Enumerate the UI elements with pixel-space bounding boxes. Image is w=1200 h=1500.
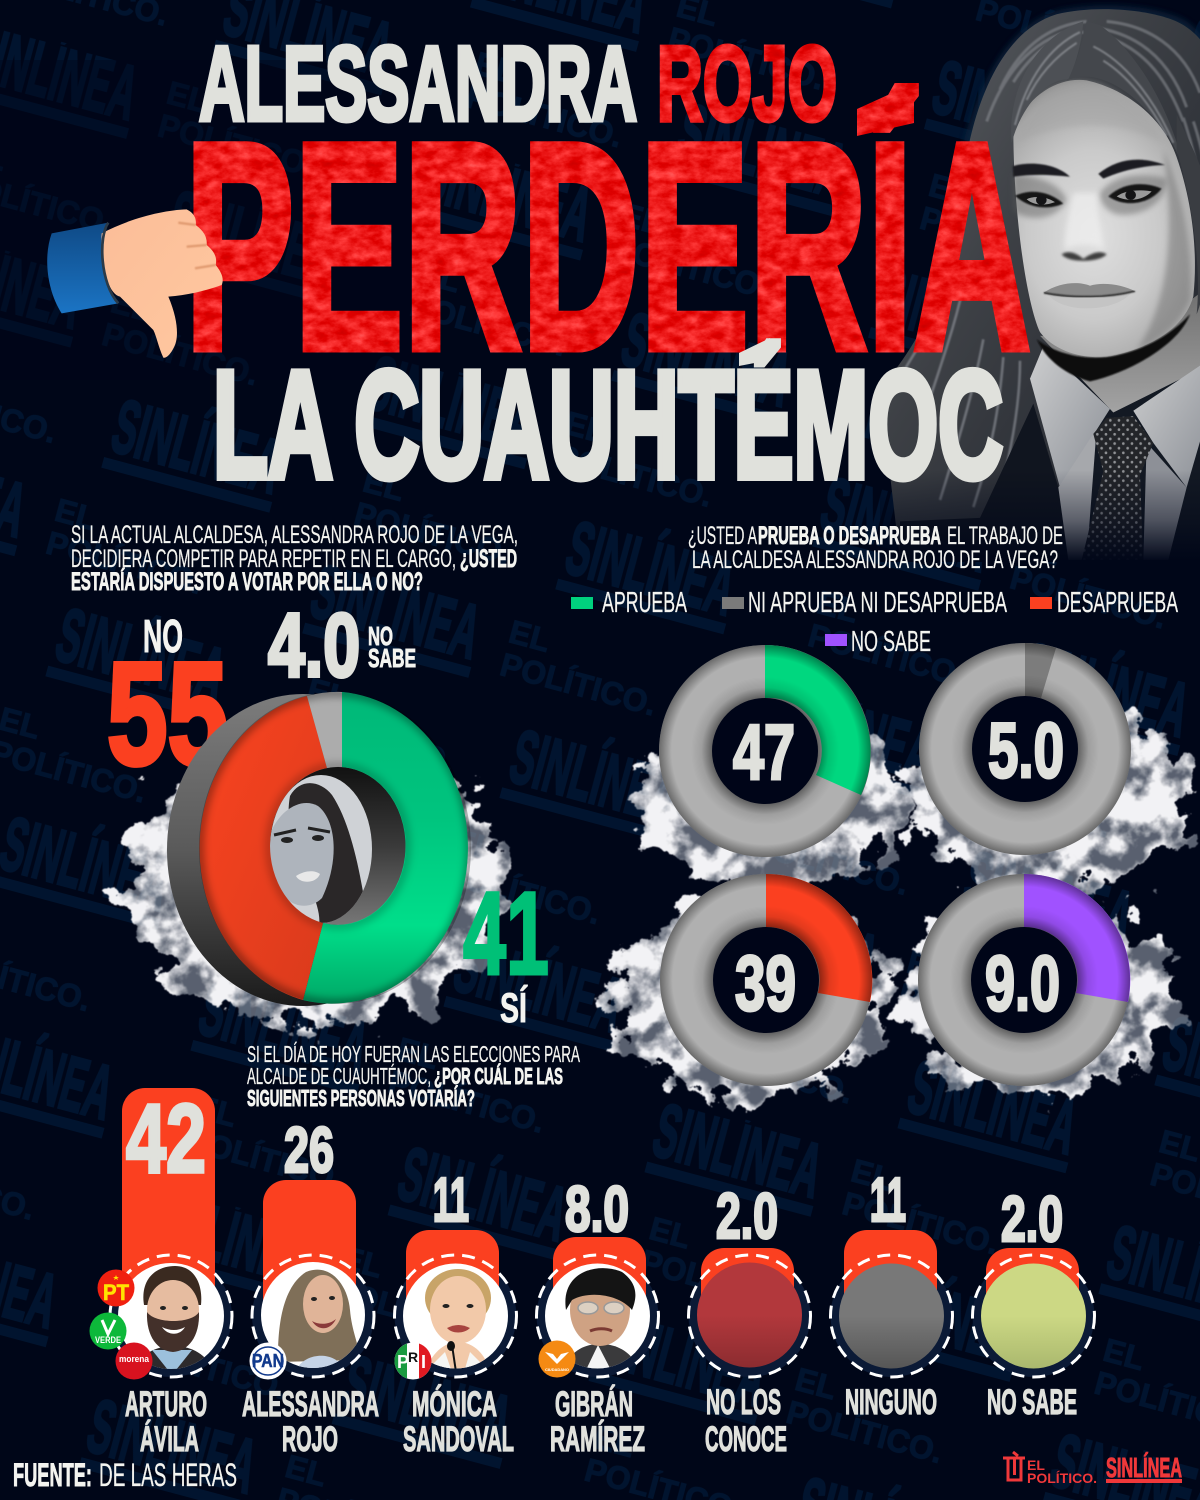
name: NO SABE <box>987 1383 1077 1422</box>
question: por quién votaría: ALCALDE DE CUAUHTÉMOC, <box>247 1063 431 1089</box>
logo: El Político <box>1003 1452 1097 1486</box>
name: SANDOVAL <box>403 1420 514 1459</box>
question: aprueba o desaprueba: ¿USTED A <box>688 522 757 550</box>
legend: NO SABE <box>851 626 931 658</box>
name <box>403 1384 514 1459</box>
logo: PT: PT <box>103 1280 130 1305</box>
stat: 4.0 no sabe: NO <box>368 621 393 651</box>
segment: no <box>200 696 327 1000</box>
3D donut chart <box>167 692 471 1006</box>
question: por quién votaría: ¿POR CUÁL DE LAS <box>434 1062 563 1089</box>
question: aprueba o desaprueba <box>688 522 1063 574</box>
logo: Verde <box>90 1312 126 1350</box>
title line 1: ROJO <box>657 25 837 143</box>
segment: sí <box>303 692 468 1004</box>
bar: No los conoce 2.0: 2.0 <box>716 1180 778 1252</box>
logo: Verde: VERDE <box>95 1335 121 1345</box>
donut: desaprueba 39: 39 <box>735 939 796 1027</box>
stat: 41 sí: SÍ <box>500 984 528 1031</box>
stat: 55 no: NO <box>143 610 183 662</box>
question: aprueba o desaprueba: PRUEBA O DESAPRUEBA <box>758 522 941 550</box>
question: aprueba o desaprueba: EL TRABAJO DE <box>947 522 1063 550</box>
clouds: right donuts <box>610 712 1195 1100</box>
question: votaría por ella: ¿USTED <box>460 545 517 573</box>
portrait fade <box>880 470 1200 562</box>
stat: 41 sí <box>463 868 549 1031</box>
question: por quién votaría <box>247 1041 580 1111</box>
bar: Ninguno 11: 11 <box>870 1166 906 1235</box>
stat: 4.0 no sabe: SABE <box>368 643 416 673</box>
name: CONOCE <box>705 1420 787 1459</box>
source: DE LAS HERAS <box>99 1457 237 1493</box>
logo: PRI: P <box>397 1352 409 1372</box>
name: GIBRÁN <box>555 1384 633 1424</box>
name <box>242 1385 379 1459</box>
bar: No sabe 2.0: 2.0 <box>1001 1183 1063 1255</box>
logo: PRI <box>394 1342 432 1380</box>
legend: APRUEBA <box>602 587 687 619</box>
bar: Arturo Ávila 42 <box>90 1084 232 1459</box>
stat: 55 no: 55 <box>107 632 228 795</box>
segment: no sabe <box>307 692 342 768</box>
bar: Gibrán Ramírez 8.0 <box>536 1173 658 1459</box>
donut: aprueba 47: 47 <box>733 708 795 796</box>
name: NINGUNO <box>845 1383 937 1422</box>
name: RAMÍREZ <box>550 1419 645 1459</box>
donut: aprueba 47 <box>659 645 871 857</box>
logo: morena <box>116 1342 152 1380</box>
question: votaría por ella: ESTARÍA DISPUESTO A VOTAR POR ELLA O NO? <box>71 567 423 596</box>
bar: No los conoce 2.0 <box>688 1180 810 1459</box>
name: ALESSANDRA <box>242 1385 379 1424</box>
source <box>13 1457 237 1493</box>
portrait: Alessandra Rojo <box>880 6 1200 562</box>
logo: Movimiento Ciudadano: CIUDADANO <box>545 1367 569 1372</box>
donut: no sabe 9.0 <box>918 874 1130 1086</box>
stat: 4.0 no sabe: 4.0 <box>268 596 360 696</box>
question: votaría por ella: SI LA ACTUAL ALCALDESA, ALESSANDRA ROJO DE LA VEGA, <box>71 521 518 549</box>
logo: El Político: POLÍTICO. <box>1027 1470 1097 1486</box>
source: FUENTE: <box>13 1457 92 1493</box>
name: NO LOS <box>706 1383 781 1422</box>
stat: 41 sí: 41 <box>463 868 549 1000</box>
donut: ni aprueba ni desaprueba 5.0 <box>919 643 1131 855</box>
name <box>125 1385 207 1459</box>
stat: 55 no <box>107 610 228 795</box>
logo: PAN: PAN <box>252 1351 284 1371</box>
name <box>550 1384 645 1459</box>
donut edge shading <box>199 692 471 1004</box>
cloud: main donut <box>128 743 508 1027</box>
bar: Alessandra Rojo 26: 26 <box>284 1114 334 1186</box>
donut: no sabe 9.0: 9.0 <box>985 939 1060 1027</box>
logo: El Político: EL <box>1027 1457 1045 1473</box>
bar: Mónica Sandoval 11 <box>394 1166 516 1459</box>
bar: Mónica Sandoval 11: 11 <box>433 1166 469 1235</box>
photo in hole <box>268 767 406 930</box>
logo: PT <box>98 1270 134 1306</box>
question: votaría por ella: DECIDIERA COMPETIR PARA REPETIR EN EL CARGO, <box>71 545 456 573</box>
title line 1: ALESSANDRA <box>199 25 637 143</box>
donut back <box>167 694 439 1006</box>
icon: thumbs down <box>47 209 223 358</box>
name <box>705 1383 787 1459</box>
donut: desaprueba 39 <box>660 874 872 1086</box>
name: ARTURO <box>125 1385 207 1424</box>
donut: ni aprueba ni desaprueba 5.0: 5.0 <box>988 706 1064 794</box>
logo: PRI: I <box>421 1352 426 1372</box>
logo: morena: morena <box>119 1354 150 1364</box>
name: ÁVILA <box>140 1419 199 1459</box>
legend <box>571 587 1178 658</box>
bar: No sabe 2.0 <box>972 1183 1094 1422</box>
question: votaría por ella <box>71 521 518 596</box>
logo: Movimiento Ciudadano <box>538 1340 576 1378</box>
logo: PRI: R <box>408 1349 418 1365</box>
question: por quién votaría: SI EL DÍA DE HOY FUERAN LAS ELECCIONES PARA <box>247 1041 580 1067</box>
legend: NI APRUEBA NI DESAPRUEBA <box>748 587 1007 619</box>
name: MÓNICA <box>412 1384 497 1424</box>
bar: Ninguno 11 <box>830 1166 952 1422</box>
bar: Alessandra Rojo 26 <box>242 1114 379 1459</box>
question: por quién votaría: SIGUIENTES PERSONAS VOTARÍA? <box>247 1084 475 1111</box>
logo: PAN <box>250 1342 286 1380</box>
bar: Gibrán Ramírez 8.0: 8.0 <box>565 1173 629 1245</box>
bar: Arturo Ávila 42: 42 <box>126 1084 206 1193</box>
name: ROJO <box>282 1420 338 1459</box>
